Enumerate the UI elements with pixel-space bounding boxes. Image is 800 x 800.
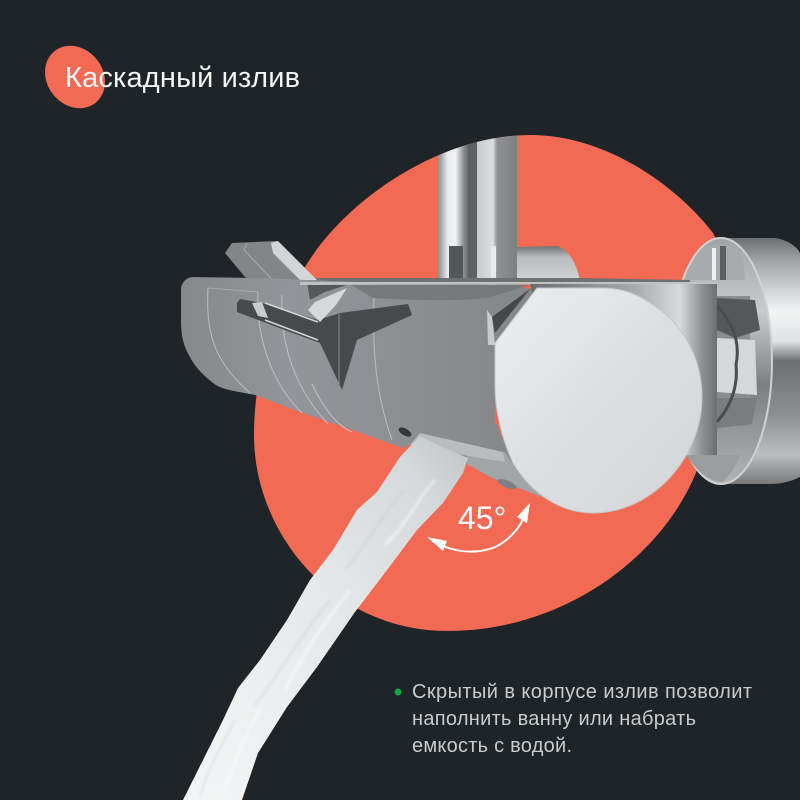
spout outlet slot (397, 425, 413, 439)
title: Каскадный излив (65, 62, 300, 94)
upper lever (225, 241, 317, 312)
vertical pipes (438, 130, 517, 285)
rear neck (517, 246, 580, 283)
body main (181, 277, 550, 500)
dark chamfer (492, 289, 530, 333)
right housing (530, 284, 717, 455)
chrome top bar (300, 282, 717, 285)
description text: емкость с водой. (412, 735, 572, 757)
description text: наполнить ванну или набрать (412, 708, 696, 730)
wall mount cylinder (670, 238, 800, 484)
description text: Скрытый в корпусе излив позволит (412, 681, 752, 703)
top face of body (350, 284, 530, 300)
small bottom oval (496, 477, 518, 491)
rear top edge (300, 278, 690, 284)
illustration: faucet (181, 130, 800, 513)
small handle plate (308, 288, 347, 322)
large coral blob (254, 135, 736, 631)
rotation arrow (427, 503, 530, 552)
end cap disc (495, 288, 702, 513)
description text (412, 681, 752, 757)
title blob (33, 34, 117, 120)
bullet: green dot (394, 688, 402, 696)
seam lines (208, 288, 392, 440)
chrome under-body strip (467, 452, 550, 500)
lower lever and Y junction (237, 299, 412, 390)
water stream (183, 433, 505, 800)
rotation angle label: 45° (458, 500, 506, 536)
